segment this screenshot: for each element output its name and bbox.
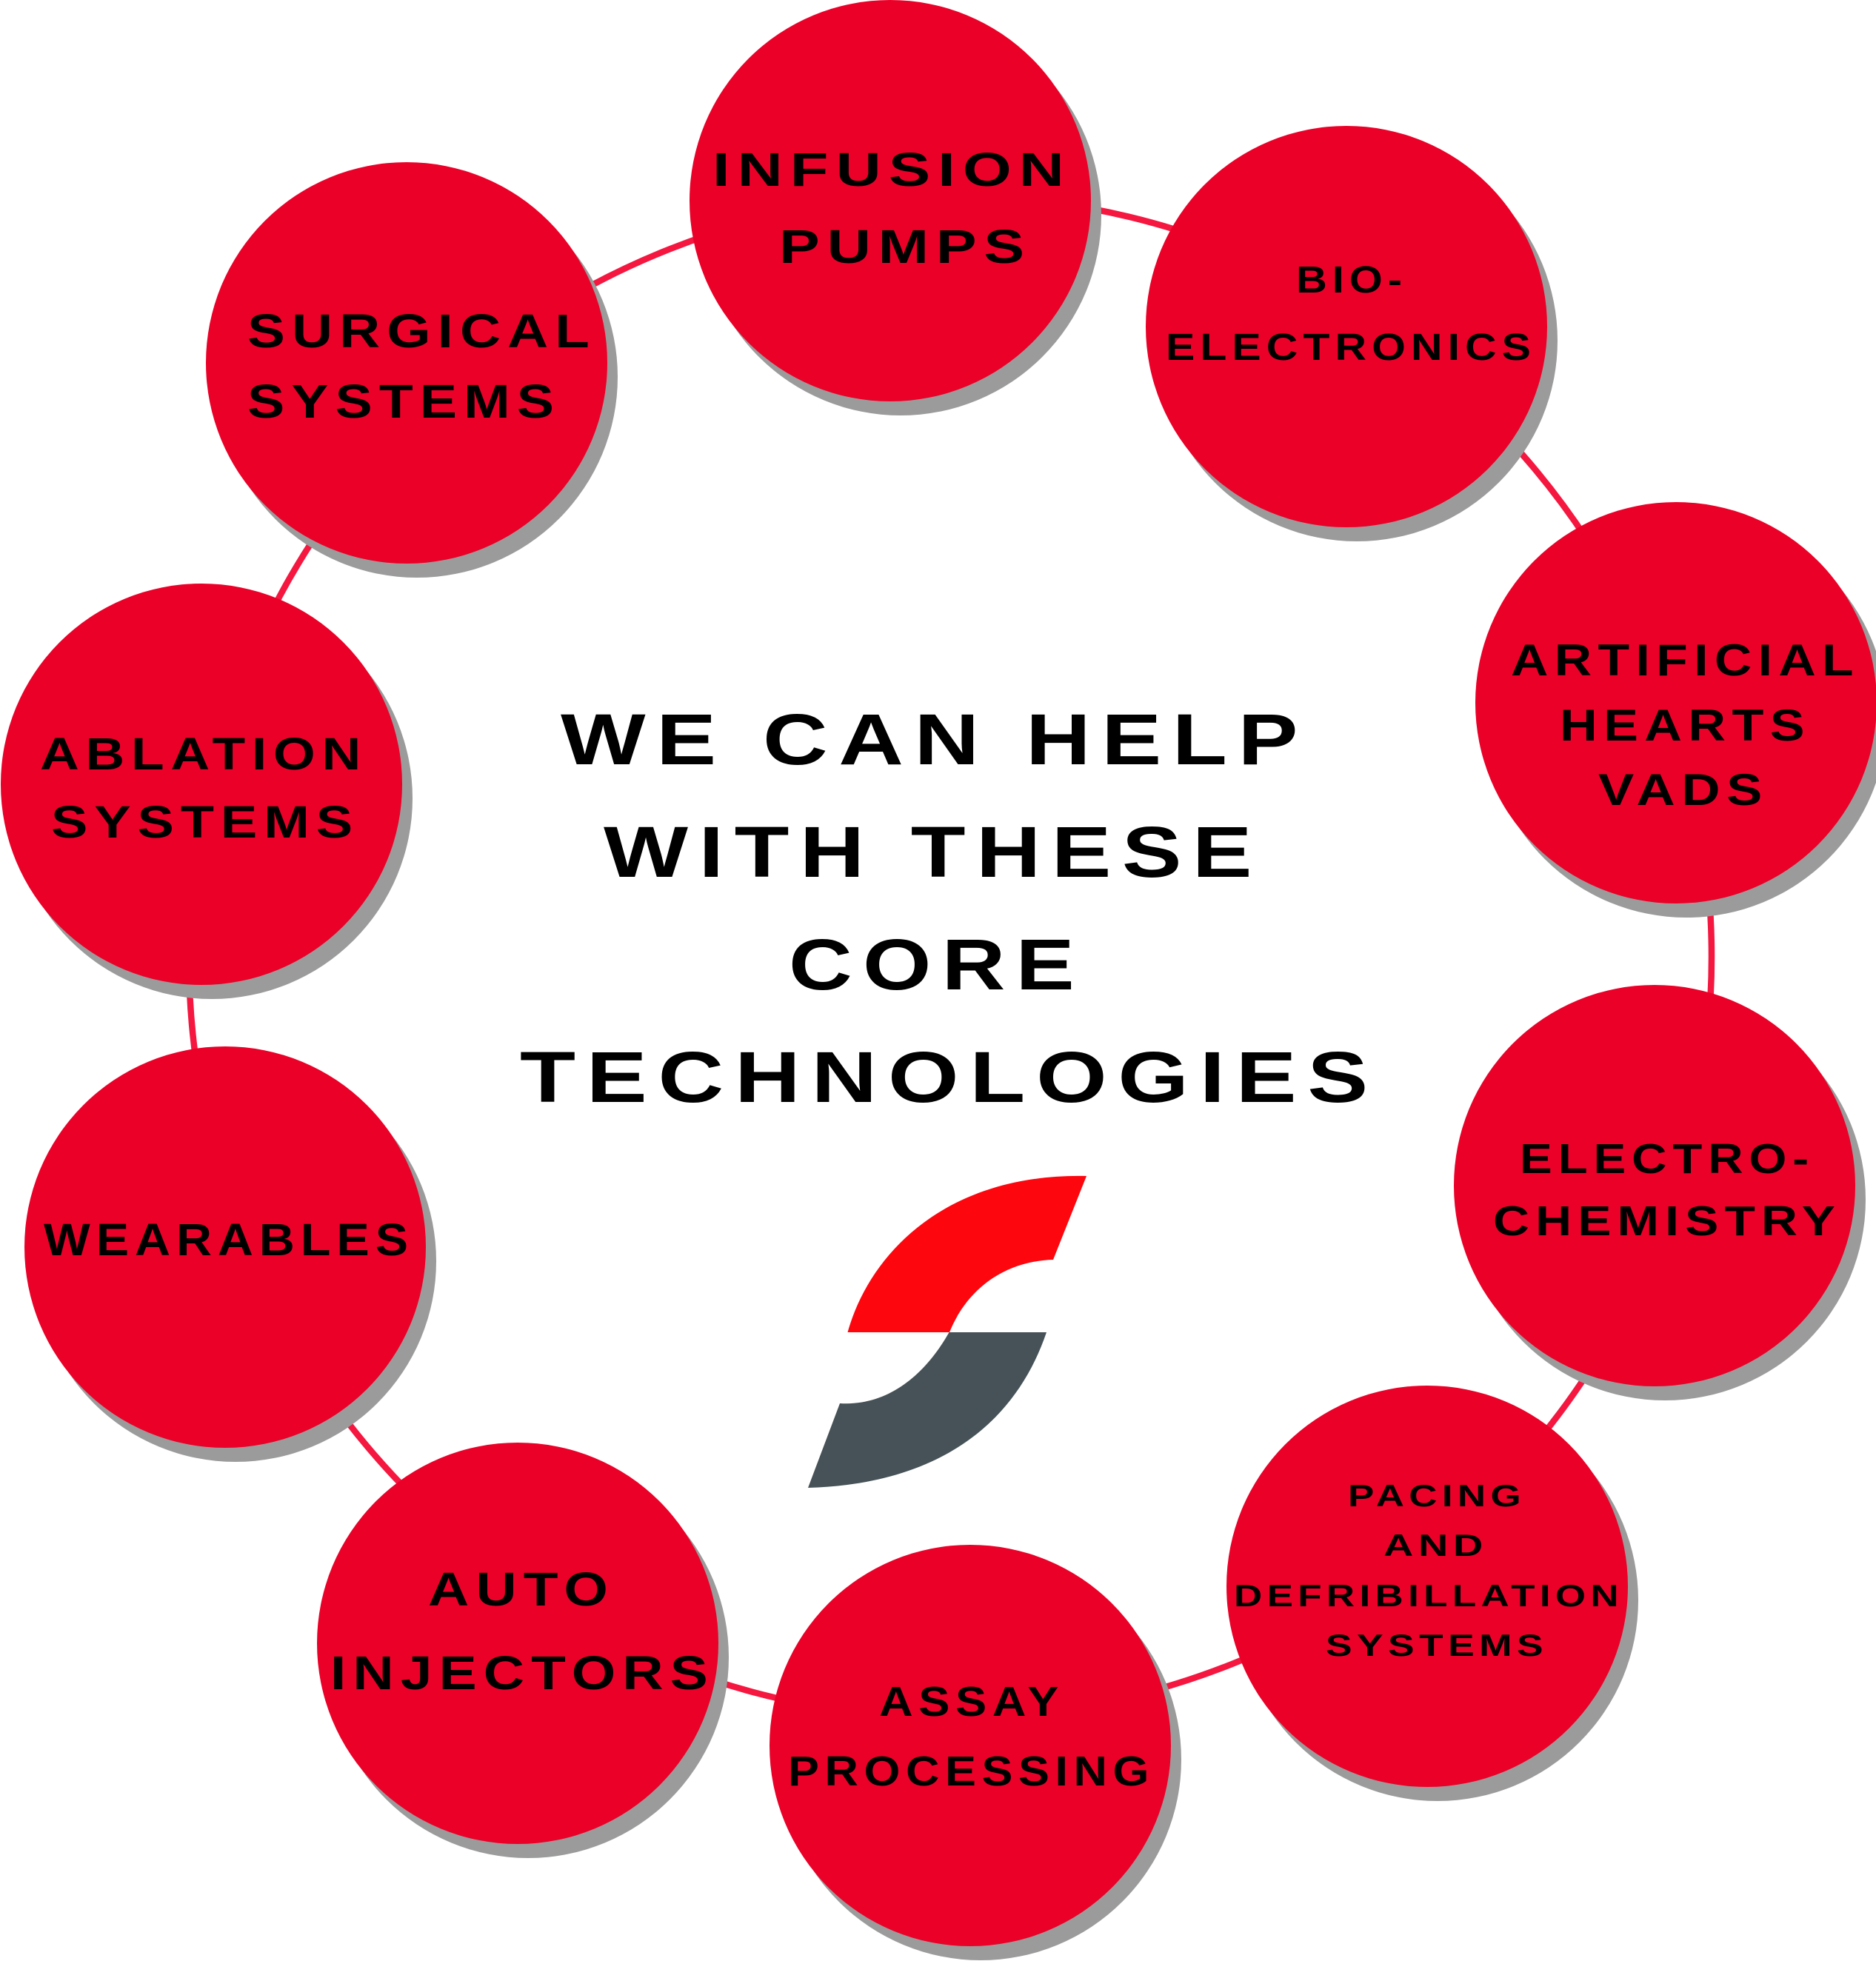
- icon: company logo S: [808, 1176, 1086, 1488]
- circle: electro-chemistry: ELECTRO-: [1520, 1135, 1815, 1183]
- circle: ablation systems: ABLATION: [40, 729, 367, 779]
- circle: assay processing: [770, 1545, 1181, 1960]
- circle: electro-chemistry: CHEMISTRY: [1493, 1197, 1841, 1245]
- circle: bio-electronics: BIO-: [1296, 258, 1407, 301]
- circle: surgical systems: SYSTEMS: [247, 375, 561, 428]
- circle: ablation systems: SYSTEMS: [51, 797, 359, 847]
- circle: pacing and defibrillation systems: PACING: [1348, 1478, 1526, 1513]
- connecting ring: [189, 196, 1712, 1718]
- circle: infusion pumps: [690, 0, 1101, 415]
- circle: auto injectors: INJECTORS: [330, 1646, 715, 1700]
- circle: electro-chemistry: [1454, 985, 1866, 1400]
- circle: bio-electronics: [1146, 126, 1558, 541]
- circle: pacing and defibrillation systems: SYSTEMS: [1326, 1628, 1548, 1663]
- central title: WITH THESE: [604, 812, 1263, 892]
- circle: assay processing: PROCESSING: [788, 1748, 1155, 1795]
- central title: [520, 699, 1379, 1118]
- circle: assay processing: ASSAY: [879, 1678, 1064, 1726]
- circle: pacing and defibrillation systems: AND: [1383, 1528, 1488, 1563]
- circle: artificial hearts VADs: VADS: [1598, 765, 1769, 815]
- circle: wearables: WEARABLES: [44, 1215, 414, 1265]
- central title: TECHNOLOGIES: [520, 1037, 1379, 1118]
- circle: artificial hearts VADs: [1475, 502, 1876, 918]
- circle: ablation systems: [1, 584, 413, 999]
- circle: pacing and defibrillation systems: DEFRIBILLATION: [1234, 1578, 1623, 1613]
- circle: auto injectors: AUTO: [428, 1563, 615, 1616]
- circle: pacing and defibrillation systems: [1226, 1386, 1638, 1801]
- central title: WE CAN HELP: [561, 699, 1309, 780]
- circle: auto injectors: [317, 1443, 729, 1858]
- circle: artificial hearts VADs: ARTIFICIAL: [1511, 635, 1860, 685]
- circle: bio-electronics: ELECTRONICS: [1166, 326, 1536, 368]
- circle: infusion pumps: PUMPS: [779, 220, 1032, 273]
- circle: infusion pumps: INFUSION: [712, 143, 1072, 196]
- circle: surgical systems: [206, 162, 618, 578]
- circle: wearables: [24, 1046, 436, 1462]
- circle: surgical systems: SURGICAL: [247, 304, 596, 358]
- circle: artificial hearts VADs: HEARTS: [1560, 701, 1811, 750]
- central title: CORE: [789, 924, 1085, 1005]
